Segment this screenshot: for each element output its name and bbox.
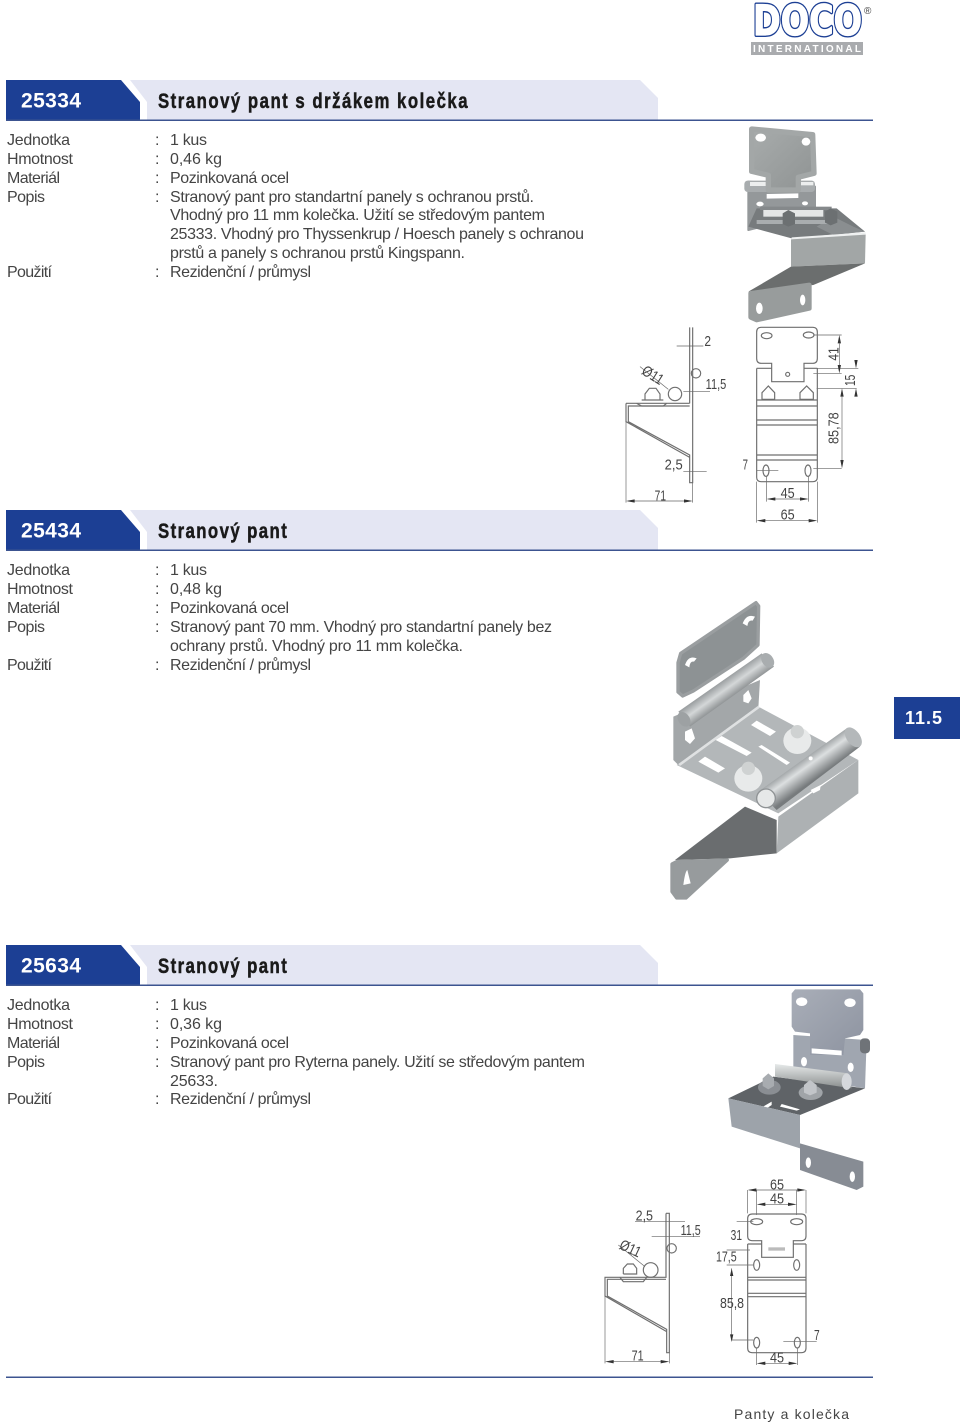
technical drawing: 25334: 65 xyxy=(781,507,795,524)
specification list: 25434: Rezidenční / průmysl xyxy=(170,656,311,674)
specification list: 25334: : xyxy=(155,132,159,149)
technical drawing: 25334: 7 xyxy=(743,457,748,474)
specification list: 25434: 0,48 kg xyxy=(170,581,222,598)
technical drawing: 25334 xyxy=(626,327,859,524)
technical drawing: 25634: 31 xyxy=(731,1227,742,1244)
panel: product 25434 xyxy=(6,510,960,898)
product image: hinge 25434 xyxy=(672,603,865,898)
section tab: 11.5: 11.5 xyxy=(905,708,942,728)
specification list: 25634: Materiál xyxy=(7,1035,60,1052)
header: 25334: 25334 xyxy=(21,90,81,112)
specification list: 25634: : xyxy=(155,1035,159,1052)
specification list: 25434: : xyxy=(155,619,159,636)
panel: product 25334 xyxy=(6,80,873,524)
specification list: 25434: Pozinkovaná ocel xyxy=(170,600,289,617)
specification list: 25634: Popis xyxy=(7,1054,45,1071)
header: 25434: Stranový pant xyxy=(158,520,287,544)
specification list: 25634: : xyxy=(155,1054,159,1071)
header: 25434: 25434 xyxy=(21,520,81,542)
specification list: 25634 xyxy=(7,997,585,1108)
technical drawing: 25634: 45 xyxy=(770,1350,784,1367)
footer rule and section name: Panty a kolečka xyxy=(734,1406,849,1422)
specification list: 25634: Použití xyxy=(7,1091,53,1108)
specification list: 25434: : xyxy=(155,657,159,674)
specification list: 25334: Vhodný pro 11 mm kolečka. Užití se středovým pantem xyxy=(170,207,545,224)
specification list: 25334: Popis xyxy=(7,189,45,206)
header: 25334 xyxy=(6,80,873,121)
technical drawing: 25334: 11,5 xyxy=(706,376,726,393)
specification list: 25334: : xyxy=(155,151,159,168)
header: 25334: Stranový pant s držákem kolečka xyxy=(158,90,468,114)
technical drawing: 25634: 2,5 xyxy=(636,1208,653,1225)
specification list: 25434: Popis xyxy=(7,619,45,636)
technical drawing: 25634: 17,5 xyxy=(716,1249,737,1266)
specification list: 25334: Pozinkovaná ocel xyxy=(170,170,289,187)
specification list: 25634: Pozinkovaná ocel xyxy=(170,1035,289,1052)
specification list: 25434: Použití xyxy=(7,657,53,674)
logo: DOCO International: ® xyxy=(864,6,872,17)
specification list: 25334 xyxy=(7,132,584,281)
technical drawing: 25634: Ø11 xyxy=(617,1237,644,1261)
specification list: 25634: 25633. xyxy=(170,1073,218,1090)
specification list: 25634: 1 kus xyxy=(170,997,207,1014)
specification list: 25334: 1 kus xyxy=(170,132,207,149)
specification list: 25434: : xyxy=(155,600,159,617)
specification list: 25434: Stranový pant 70 mm. Vhodný pro standartní panely bez xyxy=(170,619,552,636)
specification list: 25634: 0,36 kg xyxy=(170,1016,222,1033)
technical drawing: 25634: 65 xyxy=(770,1176,784,1193)
technical drawing: 25334: 41 xyxy=(826,347,843,361)
technical drawing: 25334: 2 xyxy=(704,333,711,350)
specification list: 25634: : xyxy=(155,1091,159,1108)
specification list: 25434: 1 kus xyxy=(170,562,207,579)
specification list: 25634: : xyxy=(155,997,159,1014)
specification list: 25434: Hmotnost xyxy=(7,581,74,598)
header: 25634 xyxy=(6,945,873,986)
technical drawing: 25334: 85,78 xyxy=(826,412,843,444)
specification list: 25334: Materiál xyxy=(7,170,60,187)
specification list: 25334: 0,46 kg xyxy=(170,151,222,168)
technical drawing: 25634: 7 xyxy=(814,1327,820,1344)
specification list: 25434: Materiál xyxy=(7,600,60,617)
product image: hinge 25334 xyxy=(744,129,866,320)
specification list: 25334: : xyxy=(155,264,159,281)
specification list: 25334: prstů a panely s ochranou prstů Kingspann. xyxy=(170,244,465,262)
specification list: 25334: : xyxy=(155,189,159,206)
specification list: 25334: Jednotka xyxy=(7,132,70,149)
technical drawing: 25334: 45 xyxy=(781,485,795,502)
specification list: 25634: Rezidenční / průmysl xyxy=(170,1090,311,1108)
specification list: 25334: Rezidenční / průmysl xyxy=(170,263,311,281)
product image: hinge 25634 xyxy=(728,989,870,1190)
technical drawing: 25334: 71 xyxy=(655,488,666,505)
technical drawing: 25334: Ø11 xyxy=(639,362,667,389)
header: 25634: 25634 xyxy=(21,954,81,978)
section tab: 11.5 xyxy=(894,697,960,739)
technical drawing: 25634: 85,8 xyxy=(720,1295,744,1312)
panel: product 25634 xyxy=(6,945,873,1367)
specification list: 25634: Stranový pant pro Ryterna panely. Užití se středovým pantem xyxy=(170,1054,585,1071)
specification list: 25434: : xyxy=(155,581,159,598)
technical drawing: 25334: 15 xyxy=(842,375,859,386)
technical drawing: 25334: 2,5 xyxy=(665,457,683,474)
specification list: 25434: ochrany prstů. Vhodný pro 11 mm kolečka. xyxy=(170,637,463,655)
technical drawing: 25634: 45 xyxy=(770,1190,784,1207)
specification list: 25334: Hmotnost xyxy=(7,151,74,168)
technical drawing: 25634: 11,5 xyxy=(681,1222,701,1239)
header: 25634: Stranový pant xyxy=(158,955,287,979)
logo: DOCO International: INTERNATIONAL xyxy=(753,44,861,55)
specification list: 25434 xyxy=(7,562,552,674)
technical drawing: 25634: 71 xyxy=(632,1348,644,1365)
technical drawing: 25634 xyxy=(605,1176,820,1367)
specification list: 25634: Hmotnost xyxy=(7,1016,74,1033)
specification list: 25634: Jednotka xyxy=(7,997,70,1014)
specification list: 25334: Použití xyxy=(7,264,53,281)
specification list: 25334: : xyxy=(155,170,159,187)
specification list: 25334: Stranový pant pro standartní panely s ochranou prstů. xyxy=(170,188,534,206)
specification list: 25334: 25333. Vhodný pro Thyssenkrup / Hoesch panely s ochranou xyxy=(170,226,584,243)
header: 25434 xyxy=(6,510,873,551)
specification list: 25434: : xyxy=(155,562,159,579)
specification list: 25634: : xyxy=(155,1016,159,1033)
specification list: 25434: Jednotka xyxy=(7,562,70,579)
